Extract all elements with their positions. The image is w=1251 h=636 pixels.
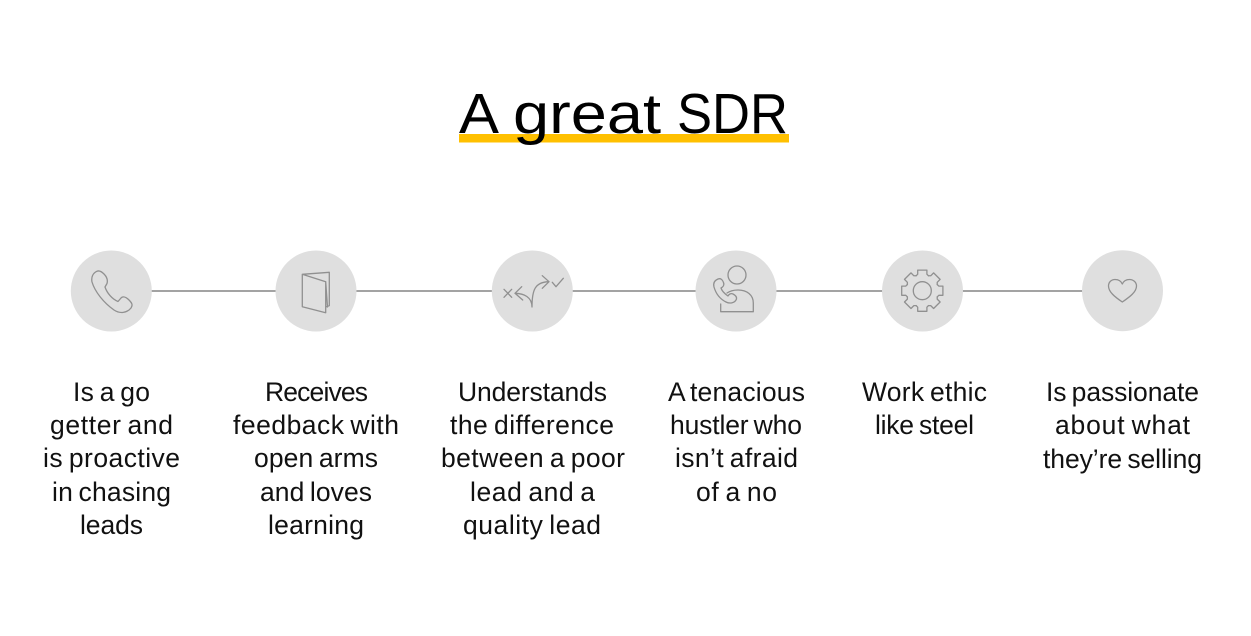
step 4 text: A tenacious <box>668 377 805 407</box>
title with yellow underline: great <box>513 82 661 146</box>
step 3 text: the difference <box>450 410 614 440</box>
step 1 icon: phone <box>71 250 152 332</box>
step 3 text <box>441 377 625 540</box>
step 6 text <box>1043 377 1202 474</box>
step 3 text: Understands <box>458 377 607 407</box>
title with yellow underline: SDR <box>677 82 788 146</box>
step 6 text: Is passionate <box>1046 377 1199 407</box>
step 3 text: quality lead <box>463 510 601 540</box>
connector line <box>151 290 1083 292</box>
title with yellow underline: A <box>459 82 499 146</box>
step 4 text <box>668 377 805 507</box>
step 2 text: Receives <box>265 377 368 407</box>
step 3 icon: diverging arrows <box>492 250 573 332</box>
step 2 text: feedback with <box>233 410 399 440</box>
step 4 icon: person on phone <box>696 250 776 332</box>
step 1 text <box>43 377 180 540</box>
title with yellow underline <box>459 82 789 146</box>
step 3 text: lead and a <box>470 477 595 507</box>
step 6 icon: heart <box>1082 250 1163 331</box>
step 2 text: and loves <box>260 477 372 507</box>
step 1 text: Is a go <box>73 377 150 407</box>
step 1 text: is proactive <box>43 443 180 473</box>
step 6 text: about what <box>1055 410 1191 440</box>
step 2 icon: booklet <box>276 250 356 332</box>
step 5 text <box>862 377 987 440</box>
step 3 text: between a poor <box>441 443 625 473</box>
step 5 text: like steel <box>875 410 974 440</box>
step 5 text: Work ethic <box>862 377 987 407</box>
step 2 text: open arms <box>254 443 378 473</box>
step 1 text: in chasing <box>52 477 171 507</box>
step 1 text: getter and <box>50 410 173 440</box>
step 4 text: of a no <box>696 477 777 507</box>
step 5 icon: gear <box>882 250 963 332</box>
step 4 text: isn’t afraid <box>675 443 798 473</box>
step 2 text <box>233 377 399 540</box>
step 2 text: learning <box>268 510 364 540</box>
step 1 text: leads <box>80 510 143 540</box>
step 6 text: they’re selling <box>1043 444 1202 474</box>
step 4 text: hustler who <box>670 410 802 440</box>
